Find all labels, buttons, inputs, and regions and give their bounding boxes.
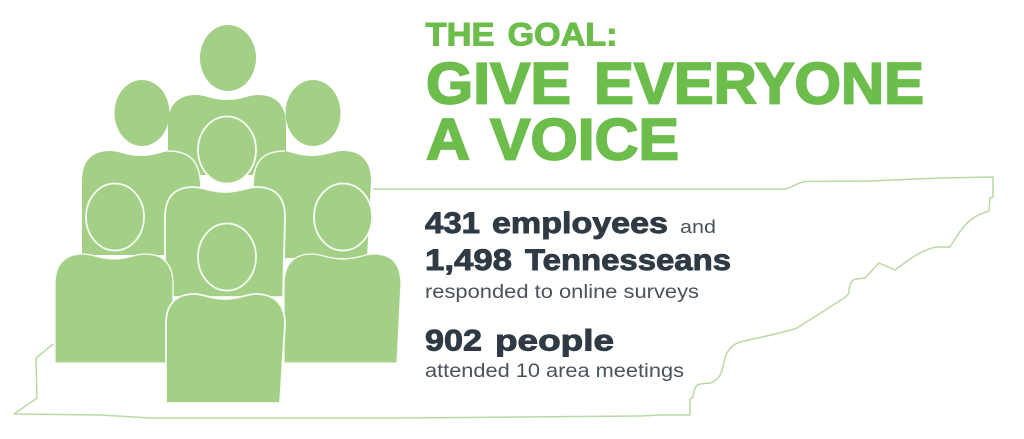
stat: tennesseans — [425, 244, 731, 277]
person: second row left — [82, 80, 200, 255]
stat: people: 902 — [425, 324, 482, 358]
stat: people — [425, 324, 614, 358]
person: second row right body edge — [253, 151, 285, 187]
person: third row right — [284, 184, 401, 363]
people group icon — [55, 25, 401, 403]
person: second row left body edge — [168, 151, 201, 187]
text: online surveys: responded to online surveys — [425, 282, 699, 303]
stat: employees — [425, 207, 668, 240]
stat: people: people — [495, 324, 614, 358]
text: area meetings: attended 10 area meetings — [425, 361, 684, 382]
stat: employees: 431 — [425, 207, 480, 240]
heading: the goal: GOAL: — [508, 16, 618, 52]
person: third row left — [55, 184, 173, 363]
person: back row top — [168, 25, 286, 175]
stat: tennesseans: Tennesseans — [525, 244, 731, 277]
heading: give everyone: GIVE — [426, 52, 571, 116]
heading: the goal — [426, 16, 618, 52]
Tennessee state outline — [14, 177, 993, 418]
heading: the goal: THE — [426, 16, 494, 52]
person: second row right — [253, 80, 371, 258]
heading: give everyone — [426, 52, 924, 116]
heading: a voice: VOICE — [490, 108, 679, 172]
text: and: and — [680, 216, 716, 237]
stat: tennesseans: 1,498 — [425, 244, 512, 277]
person: middle centre — [165, 116, 285, 297]
heading: give everyone: EVERYONE — [594, 52, 924, 116]
stat: employees: employees — [492, 207, 668, 240]
person: front centre — [166, 224, 285, 403]
heading: a voice: A — [426, 108, 470, 172]
